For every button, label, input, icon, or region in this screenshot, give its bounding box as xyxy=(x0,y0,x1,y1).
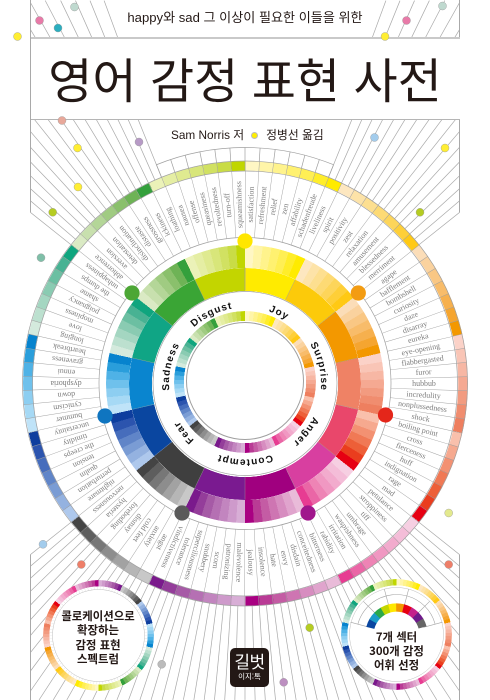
words: fear: tension xyxy=(71,452,96,470)
words: anger: indignation xyxy=(383,459,419,484)
badge: seven sectors xyxy=(341,579,452,690)
words: fear: anxiety xyxy=(142,524,162,549)
words: surprise: bombshell xyxy=(384,283,418,308)
words: surprise: shock xyxy=(411,412,431,424)
words: sadness: dysphoria xyxy=(50,379,82,388)
sector markers xyxy=(97,233,393,521)
words: surprise: furor xyxy=(415,367,432,377)
words: disgust: ickiness xyxy=(152,211,172,238)
words: disgust: turn-off xyxy=(222,192,233,218)
words: sadness: unhappiness xyxy=(83,261,120,292)
badge text: 어휘 선정 xyxy=(374,657,419,673)
words: surprise xyxy=(378,267,447,424)
words: contempt: envy xyxy=(279,550,291,567)
words: fear: dismay xyxy=(123,512,144,535)
words: anger: mad xyxy=(380,483,397,498)
words: joy xyxy=(246,185,397,282)
words: joy: merriment xyxy=(366,253,397,282)
words: joy: relief xyxy=(268,197,279,216)
badge text: 확장하는 xyxy=(77,622,119,638)
words: contempt: conceitedness xyxy=(295,529,319,574)
words: anger: tiff xyxy=(359,509,372,523)
sector labels: Fear xyxy=(174,423,194,444)
words: surprise: incredulity xyxy=(406,389,441,401)
words: joy: relaxation xyxy=(343,228,370,259)
words: fear: angst xyxy=(154,533,170,552)
subtitle: happy와 sad 그 이상이 필요한 이들을 위한 xyxy=(127,10,363,25)
words: disgust: squeamishness xyxy=(234,181,245,228)
words: disgust: grossness xyxy=(141,215,164,246)
words: anger: irritation xyxy=(327,522,349,551)
badge text: 스펙트럼 xyxy=(77,651,119,667)
badge text xyxy=(369,628,424,673)
words: sadness: heartbreak xyxy=(52,342,87,357)
words: sadness: down xyxy=(57,390,75,400)
words: joy: satisfaction xyxy=(246,186,256,223)
words: surprise: nonplussedness xyxy=(398,399,447,414)
words: fear: the creeps xyxy=(63,441,95,461)
words: fear: uncertainty xyxy=(53,420,90,438)
words: disgust: disinclination xyxy=(116,224,150,263)
words: fear xyxy=(53,420,170,552)
sector labels: Disgust xyxy=(190,302,232,327)
words: disgust xyxy=(92,181,245,282)
gradient wheel ring xyxy=(106,244,384,522)
words: joy: affability xyxy=(288,197,304,227)
words: surprise: daze xyxy=(403,309,420,323)
badge inner ticks xyxy=(50,586,148,684)
words: sadness: bummer xyxy=(55,411,83,425)
words: fear: timidity xyxy=(62,432,88,448)
badge text: 7개 섹터 xyxy=(376,628,417,644)
publisher logo: 길벗 xyxy=(234,648,265,673)
top rays xyxy=(30,0,460,245)
badge text xyxy=(61,608,135,667)
words: disgust: aversion xyxy=(104,246,129,272)
sector labels: Anger xyxy=(294,416,318,446)
words: contempt: insolence xyxy=(256,546,268,577)
words: fear: qualm xyxy=(77,463,100,481)
words: disgust: nausea xyxy=(175,203,191,227)
words: fear: perturbation xyxy=(76,467,114,495)
sector labels xyxy=(162,302,328,466)
words: joy: amusement xyxy=(350,234,381,267)
words: surprise: eye-opening xyxy=(401,341,441,357)
words: anger xyxy=(318,419,440,555)
words: sadness: longing xyxy=(59,331,85,346)
words: sadness: shame xyxy=(78,287,100,305)
words: anger: umbrage xyxy=(344,510,369,537)
words: fear: nervousness xyxy=(91,484,126,515)
words: surprise: curiosity xyxy=(392,296,421,316)
badge fan chart xyxy=(349,587,444,682)
words: disgust: distaste xyxy=(132,224,153,249)
words: fear: hysteria xyxy=(104,496,129,520)
words: contempt: vindictiveness xyxy=(159,525,186,570)
words: anger: fierceness xyxy=(395,441,427,461)
author line: Sam Norris 저 정병선 옮김 xyxy=(171,128,324,142)
title band: 영어 감정 표현 사전 xyxy=(48,42,442,112)
words: disgust: abhorrence xyxy=(92,252,125,282)
words: contempt: tolerance xyxy=(174,536,192,567)
words: sadness: graveness xyxy=(51,354,83,367)
words: anger: waspishness xyxy=(333,512,362,549)
words: surprise: hubbub xyxy=(412,379,436,388)
words: fear: cold feet xyxy=(131,517,154,545)
solid wheel ring xyxy=(129,268,361,500)
words: joy: positivity xyxy=(326,215,349,246)
words: anger: stroppiness xyxy=(358,492,389,524)
sector labels: Surprise xyxy=(311,342,328,390)
words: disgust: queasiness xyxy=(197,192,213,226)
words: joy: zest xyxy=(340,228,355,244)
words: joy: spirit xyxy=(320,215,336,234)
badge text: 300개 감정 xyxy=(369,643,424,659)
badge: collocation spectrum xyxy=(42,580,154,690)
words: contempt: hate xyxy=(268,553,279,568)
words: contempt: jealousy xyxy=(246,548,256,576)
words: sadness: poignancy xyxy=(67,295,100,317)
sector labels: Contempt xyxy=(218,455,273,466)
outer colour ring xyxy=(22,161,468,606)
words: contempt: snobbery xyxy=(198,543,213,573)
words: anger: cross xyxy=(406,433,424,447)
words: anger: rabidity xyxy=(318,529,337,555)
words: sadness: mopiness xyxy=(64,307,95,326)
words: joy: blessedness xyxy=(357,243,390,275)
words: anger: rage xyxy=(387,474,404,489)
words: sadness xyxy=(50,261,120,425)
words: disgust: detestation xyxy=(110,235,139,267)
words: contempt xyxy=(159,525,328,583)
words: anger: boiling point xyxy=(397,419,440,439)
words: surprise: agape xyxy=(378,267,399,286)
words: sadness: the dumps xyxy=(79,273,111,299)
words: disgust: loathing xyxy=(163,206,182,233)
inner colour ring xyxy=(174,311,316,453)
words: fear: foreboding xyxy=(110,500,140,532)
words: sadness: cynicism xyxy=(52,400,82,413)
badge colour ring xyxy=(341,579,452,690)
words: fear: nightmare xyxy=(86,477,117,504)
publisher logo: 이지:톡 xyxy=(238,671,261,682)
words: joy: refreshment xyxy=(256,185,269,225)
badge colour ring xyxy=(42,580,154,690)
bottom rays xyxy=(30,522,460,700)
words: contempt: scorn xyxy=(211,551,222,569)
words: contempt: superciliousness xyxy=(182,529,206,581)
words: contempt: disdain xyxy=(288,543,304,567)
words: contempt: malevolence xyxy=(234,542,244,583)
words: joy: liveliness xyxy=(307,204,328,235)
words: surprise: flabbergasted xyxy=(401,353,444,368)
sector labels: Joy xyxy=(269,306,288,320)
badge text: 감정 표현 xyxy=(75,637,121,653)
words: sadness: love xyxy=(67,321,83,334)
words: surprise: eureka xyxy=(407,331,430,345)
words: sadness: ennui xyxy=(57,367,75,377)
words: disgust: offense xyxy=(186,199,202,224)
badge text: 콜로케이션으로 xyxy=(61,608,135,624)
words: surprise: disarray xyxy=(401,319,428,335)
words: anger: petulance xyxy=(367,486,396,513)
words: joy: zen xyxy=(279,203,290,215)
words: anger: huff xyxy=(398,454,414,468)
words: contempt: bitterness xyxy=(307,532,328,563)
words: joy: schadenfreude xyxy=(295,192,319,238)
sector labels: Sadness xyxy=(162,344,178,390)
words: disgust: revoltedness xyxy=(209,187,224,227)
words: surprise: bafflement xyxy=(378,272,412,299)
words: contempt: patronizing xyxy=(222,543,234,580)
publisher logo xyxy=(230,648,269,687)
